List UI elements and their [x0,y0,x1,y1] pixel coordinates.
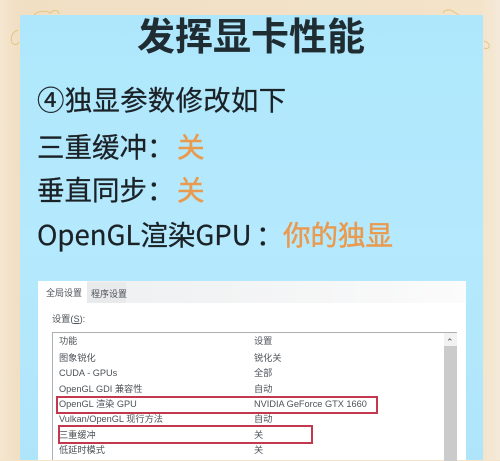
scrollbar [444,333,457,461]
text: OpenGL GPU setting [37,213,393,253]
tab: program settings [87,282,126,303]
row: low latency mode: 低延时模式 [59,445,105,455]
text: vsync setting: 垂直同步 [37,168,147,208]
settings list [52,332,457,460]
text: triple buffering setting [37,125,204,165]
value: Vulkan present method: 自动 [254,414,272,424]
value: OpenGL GDI compatibility: 自动 [254,384,272,394]
tab bar [38,281,466,303]
tab: global settings [38,281,87,304]
value: OpenGL render GPU: NVIDIA GeForce GTX 1660 [254,399,367,409]
text: triple buffering setting: ： [147,125,174,165]
text: triple buffering setting: 关 [177,125,204,165]
row: image sharpening: 图象锐化 [59,353,96,363]
text: step heading: ④独显参数修改如下 [37,78,286,118]
row: Vulkan present method: Vulkan/OpenGL 现行方法 [59,414,163,424]
callout: OpenGL GPU highlight [56,396,378,414]
value: CUDA GPUs: 全部 [254,368,272,378]
text: vsync setting: 关 [177,168,204,208]
text: vsync setting: ： [147,168,174,208]
value: low latency mode: 关 [254,445,263,455]
scrollbar thumb [444,346,457,461]
label: settings: 设置(S): [52,314,85,324]
value: image sharpening: 锐化关 [254,353,282,363]
text: OpenGL GPU setting: 你的独显 [283,213,393,253]
row: header value: 设置 [254,336,272,346]
text: triple buffering setting: 三重缓冲 [37,125,147,165]
text: OpenGL GPU setting: ： [256,213,284,253]
panel: settings screenshot [38,281,466,460]
text: vsync setting [37,168,204,208]
title: 发挥显卡性能 [137,17,365,59]
row: header: 功能 [59,336,77,346]
row: OpenGL render GPU: OpenGL 渲染 GPU [59,399,137,409]
value: triple buffering: 关 [254,430,263,440]
scroll arrow: ⌃ [446,337,454,347]
row: CUDA GPUs: CUDA - GPUs [59,368,117,378]
row: triple buffering: 三重缓冲 [59,430,96,440]
text: OpenGL GPU setting: OpenGL渲染GPU [37,213,252,253]
tab: program settings: 程序设置 [91,289,127,299]
row: OpenGL GDI compatibility: OpenGL GDI 兼容性 [59,384,142,394]
callout: triple buffering highlight [58,425,313,444]
tab: global settings: 全局设置 [46,288,82,298]
